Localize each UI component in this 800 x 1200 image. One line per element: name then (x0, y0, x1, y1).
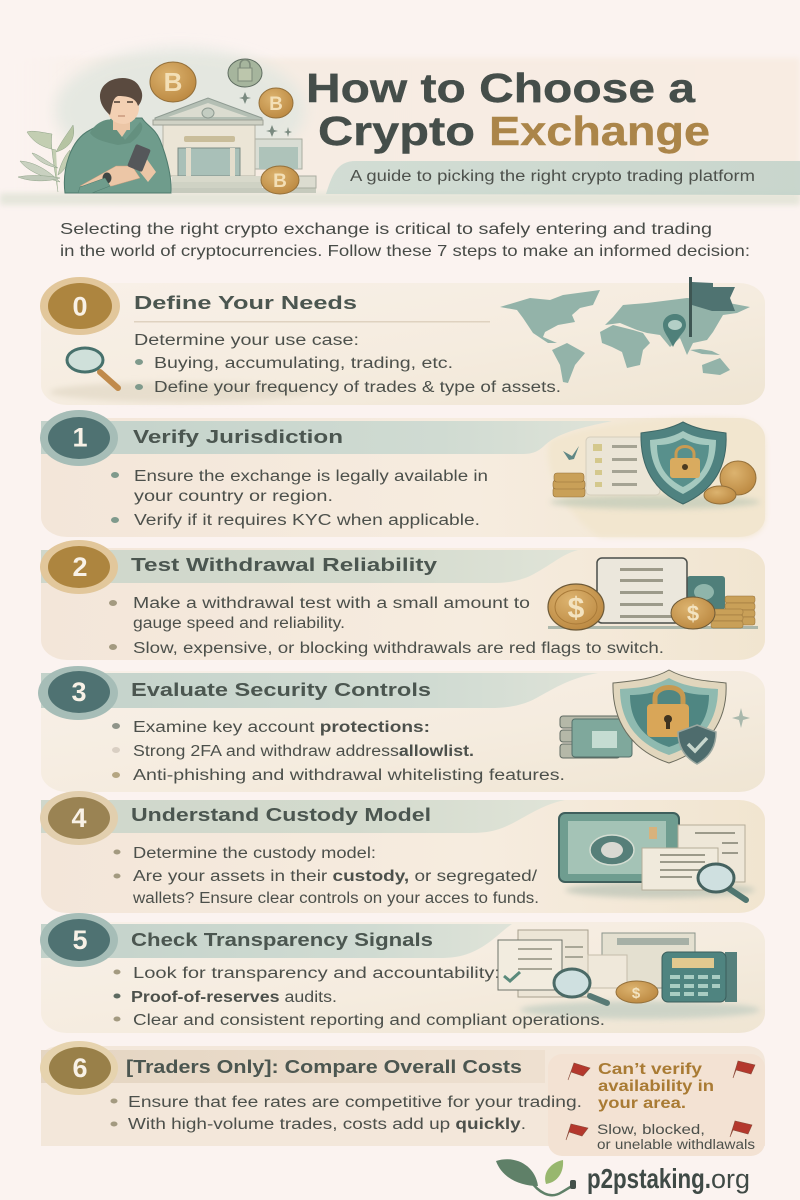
step 2 heading band (41, 550, 578, 583)
step 2 badge: 2 (72, 552, 88, 582)
step 0 badge: 0 (72, 292, 88, 322)
step 3 text: Examine key account protections: (133, 719, 430, 736)
intro text: in the world of cryptocurrencies. Follow these 7 steps to make an informed decision: (60, 243, 750, 260)
header illustration: floating coins: B (164, 67, 182, 97)
step 2 badge (40, 540, 118, 594)
panel: step 5 transparency (40, 913, 765, 1033)
step 3 text (112, 719, 565, 784)
header illustration: plant leaves (18, 125, 74, 192)
step 4 heading band (41, 800, 565, 833)
step 0 badge (40, 277, 120, 335)
step 0 text: Buying, accumulating, trading, etc. (154, 355, 453, 372)
callout text: Slow, blocked, (597, 1121, 705, 1137)
step 2 heading: Test Withdrawal Reliability (131, 555, 437, 575)
header illustration: person with phone (64, 78, 171, 193)
header banner (0, 48, 800, 205)
header illustration: floating coins: B (269, 94, 283, 115)
step 1 heading: Verify Jurisdiction (133, 427, 343, 447)
icon: magnifier (67, 348, 118, 388)
step 6 badge: 6 (72, 1053, 88, 1083)
icon: checklist shield and coins (553, 422, 756, 504)
title: Exchange (489, 108, 710, 154)
step 6 text: With high-volume trades, costs add up quickly . (128, 1116, 526, 1133)
icon: red flags (566, 1061, 755, 1140)
callout text: availability in (598, 1078, 714, 1095)
step 5 heading band (41, 924, 512, 958)
icon: vault and documents (559, 813, 755, 900)
step 1 text (111, 468, 488, 529)
step 6 badge (40, 1041, 118, 1095)
step 2 text: Make a withdrawal test with a small amount to (133, 595, 530, 612)
step 4 text: Are your assets in their custody, or segregated/ (133, 868, 538, 885)
step 4 badge: 4 (71, 803, 87, 833)
step 5 text: Look for transparency and accountability: (133, 965, 500, 982)
panel: step 4 custody (40, 791, 765, 913)
intro text (60, 221, 750, 260)
step 6 heading: [Traders Only]: Compare Overall Costs (126, 1057, 522, 1077)
callout text: your area. (598, 1095, 686, 1112)
step 6 text (110, 1094, 582, 1133)
step 0 heading: Define Your Needs (134, 293, 357, 313)
step 4 text: wallets? Ensure clear controls on your acces to funds. (132, 890, 539, 907)
step 1 text: your country or region. (134, 488, 333, 505)
step 3 heading band (41, 673, 598, 708)
callout text (597, 1061, 755, 1152)
icon: flag and pin (663, 277, 735, 347)
step 5 text: Clear and consistent reporting and compliant operations. (133, 1012, 605, 1029)
step 3 text: Strong 2FA and withdraw address allowlist. (133, 743, 474, 760)
panel: step 0 define your needs (40, 277, 765, 405)
step 1 text: Verify if it requires KYC when applicable. (134, 512, 480, 529)
intro text: Selecting the right crypto exchange is critical to safely entering and trading (60, 221, 712, 238)
step 3 badge (38, 666, 118, 720)
panel: step 1 verify jurisdiction (40, 410, 765, 537)
title (306, 65, 710, 154)
callout text: Can’t verify (598, 1061, 702, 1078)
step 4 text (114, 845, 539, 907)
logo: p2pstaking.org (496, 1159, 750, 1195)
step 6 text: Ensure that fee rates are competitive for your trading. (128, 1094, 582, 1111)
step 5 heading: Check Transparency Signals (131, 930, 433, 950)
step 1 text: Ensure the exchange is legally available in (134, 468, 488, 485)
subtitle ribbon: A guide to picking the right crypto trading platform (350, 168, 755, 185)
step 5 badge (40, 913, 118, 967)
step 4 badge (40, 791, 118, 845)
logo: p2pstaking.org: org (711, 1164, 750, 1194)
icon: security shield and safe (560, 670, 750, 764)
header illustration: floating coins: B (273, 171, 287, 192)
step 1 badge: 1 (72, 422, 88, 452)
header illustration: floating coins (150, 59, 299, 194)
step 4 text: Determine the custody model: (133, 845, 376, 862)
step 4 heading: Understand Custody Model (131, 805, 431, 825)
callout text: or unelable withdlawals (597, 1137, 755, 1152)
logo: p2pstaking.org: p2pstaking. (587, 1163, 711, 1194)
step 0 text: Define your frequency of trades & type of assets. (154, 379, 561, 396)
step 2 text: gauge speed and reliability. (133, 615, 345, 632)
step 3 badge: 3 (71, 677, 87, 707)
step 0 text: Determine your use case: (134, 332, 359, 349)
step 6 heading band (41, 1050, 545, 1083)
step 5 text: Proof-of-reserves audits. (131, 989, 337, 1006)
icon: withdrawal checklist and coins (548, 558, 758, 630)
step 2 text: Slow, expensive, or blocking withdrawals are red flags to switch. (133, 640, 664, 657)
step 5 badge: 5 (72, 925, 88, 955)
header illustration: bank building (153, 98, 316, 193)
title: Crypto (318, 108, 475, 154)
step 1 badge (40, 410, 118, 466)
step 3 heading: Evaluate Security Controls (131, 680, 431, 700)
callout: red flags (566, 1061, 755, 1152)
step 2 text (109, 595, 664, 657)
panel: step 2 test withdrawal (40, 540, 765, 660)
panel: step 3 evaluate security (38, 666, 765, 792)
icon: audit documents and calculator (498, 930, 737, 1003)
panel: step 6 compare costs (40, 1041, 765, 1156)
step 3 text: Anti-phishing and withdrawal whitelisting features. (133, 767, 565, 784)
subtitle ribbon (326, 161, 800, 195)
title: How to Choose a (306, 65, 696, 111)
icon: withdrawal checklist and coins: $ (568, 592, 585, 625)
step 5 text (114, 965, 605, 1029)
step 1 heading band (41, 421, 612, 454)
icon: world map (500, 290, 750, 383)
icon: audit documents and calculator: $ (632, 985, 641, 1002)
icon: withdrawal checklist and coins: $ (687, 601, 699, 626)
step 0 text (134, 332, 561, 396)
icon: leaves (496, 1159, 576, 1195)
